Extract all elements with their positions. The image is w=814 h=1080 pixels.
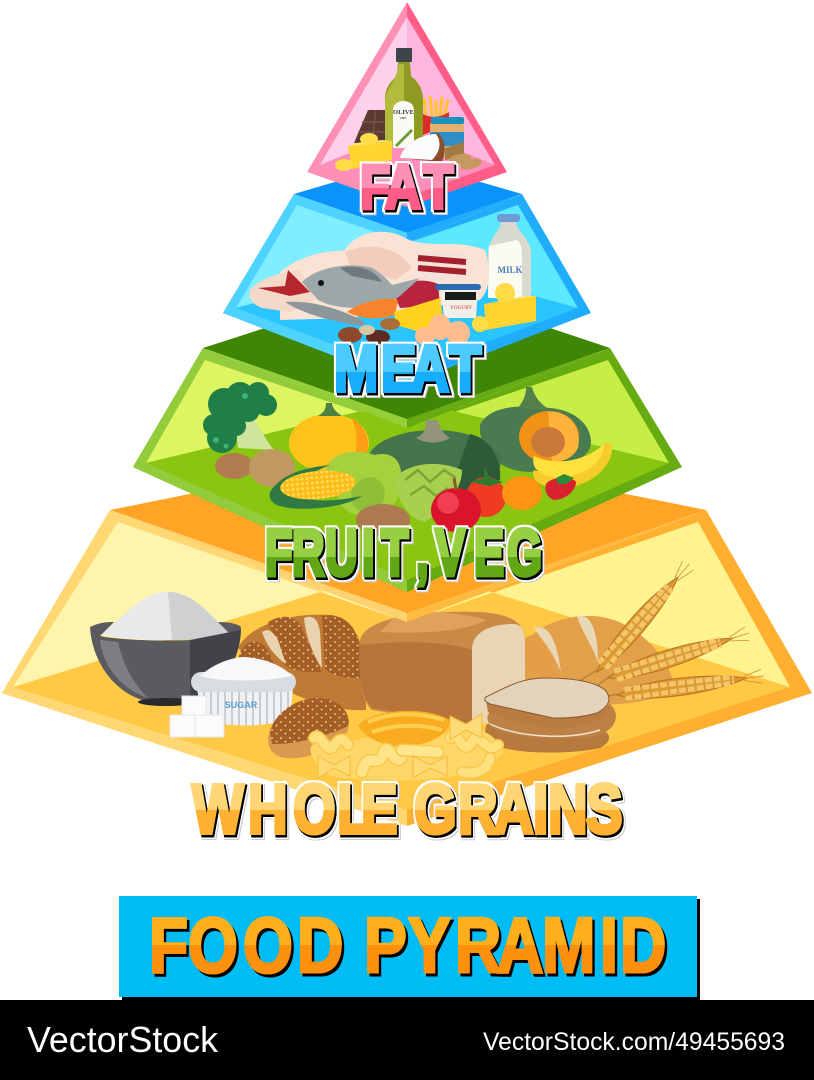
broccoli [203,382,277,453]
baguette: dark seeded loaf [238,615,366,710]
cheese [394,298,443,332]
coconut [400,133,445,162]
wheat ear 3 [616,667,765,704]
butter block [335,133,392,171]
label: MEAT: MEAT [334,331,481,405]
olive oil bottle: OIL [400,116,407,120]
title text: FOOD PYRAMID [149,902,666,989]
spaghetti bundle [358,711,450,746]
pasta [311,711,503,781]
cut green squash [480,387,591,472]
potatoes [215,449,295,487]
foods: vegetables and fruit [203,382,612,536]
footer image url: VectorStock.com/49455693 [483,1028,785,1056]
yogurt label: YOGURT [450,306,473,311]
olive oil bottle [385,48,423,148]
sliced loaf of bread [359,612,525,725]
label: FAT: FAT [360,152,453,221]
tier: fat [307,2,507,207]
salmon [347,299,398,318]
yogurt [435,284,481,318]
yellow pumpkin [289,403,369,472]
milk bottle [488,214,531,298]
footer watermark bar [0,1000,814,1080]
butter block [472,283,536,332]
pasta backing pile [311,728,503,781]
small fish [285,302,365,326]
seeded bun [268,698,349,758]
title banner [119,896,700,1000]
chocolate bar [354,110,388,146]
artichoke [395,464,462,522]
eggs [415,314,470,345]
footer brand: VectorStock [27,1019,219,1060]
peanut butter jar [430,117,464,160]
strawberry [545,474,576,500]
sugar label: SUGAR [225,700,258,710]
tomato [466,466,506,517]
bread slices [485,678,616,753]
sugar jar [191,657,296,726]
fusilli curls [314,735,498,773]
bacon [417,252,467,280]
tier: fruit and vegetables [133,282,682,592]
fries [423,96,449,135]
wheat stalks [578,558,765,704]
banana bunch [533,442,612,488]
label: WHOLE GRAINS: WHOLE GRAINS [192,771,622,849]
tier: whole grains (bottom pyramid layer) [2,510,812,826]
peanuts [448,152,483,172]
red meat [392,281,440,308]
label: FRUIT, VEG: FRUIT,VEG [265,515,542,589]
nuts [338,318,400,344]
grey fish [302,265,420,308]
bowtie pasta [318,714,482,778]
steak [250,270,315,312]
sugar cubes [170,696,224,737]
foods: meat, fish and dairy [250,214,536,345]
orange [502,476,542,510]
potato [356,504,410,536]
tier: meat and dairy [223,162,591,384]
wheat ear 1 [590,558,696,678]
wheat ear 2 [605,625,752,686]
apple [431,478,481,532]
chicken [280,232,489,320]
bowl of flour [90,592,241,706]
milk label: MILK [497,265,523,275]
corn [269,465,362,509]
lettuce [326,452,401,515]
foods: fats and oils [335,48,483,172]
olive oil label: OLIVE [393,109,414,116]
foods: grains, bread and sugar [90,558,765,781]
baguette: light loaf [520,615,673,705]
green squash [367,420,501,494]
tier: fruit and veg top face on grains [110,450,706,622]
